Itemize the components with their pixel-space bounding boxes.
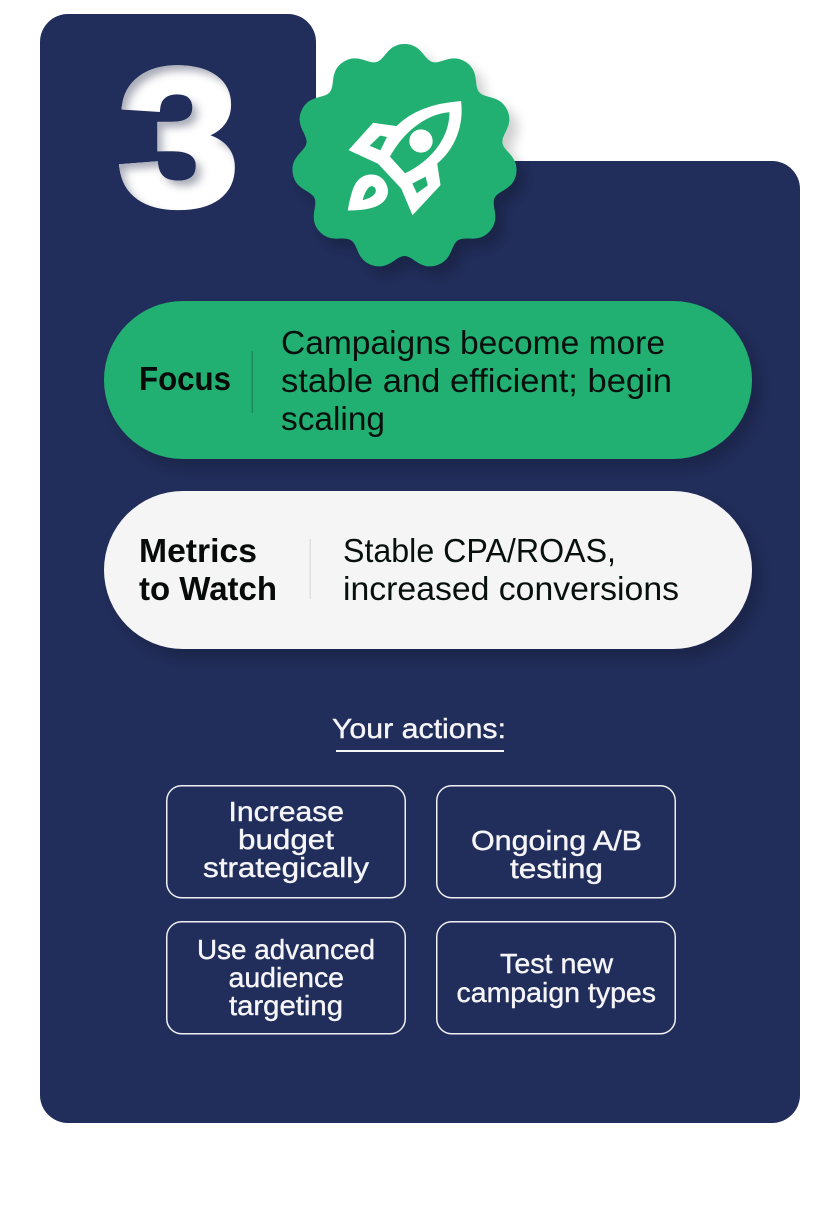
action: test new campaign types xyxy=(437,922,675,1034)
focus description: stable and efficient; begin xyxy=(281,363,672,400)
action: ongoing A/B testing: Ongoing A/B xyxy=(471,825,642,856)
focus description xyxy=(281,325,672,438)
action: use advanced audience targeting: audience xyxy=(228,962,344,993)
panel: metrics pill xyxy=(104,491,752,649)
badge with rocket icon xyxy=(292,44,517,266)
focus description: scaling xyxy=(281,401,385,438)
metrics heading: Metrics xyxy=(139,532,257,569)
metrics description: Stable CPA/ROAS, xyxy=(343,533,616,570)
action: use advanced audience targeting: Use advanced xyxy=(197,934,375,965)
icon: scalloped green badge xyxy=(292,44,517,266)
action: use advanced audience targeting xyxy=(167,922,405,1034)
panel: focus pill xyxy=(104,301,752,459)
metrics pill background xyxy=(104,491,752,649)
action: increase budget strategically: budget xyxy=(238,824,334,855)
icon: rocket xyxy=(348,102,461,214)
action: ongoing A/B testing xyxy=(437,786,675,898)
action: increase budget strategically xyxy=(167,786,405,898)
action: test new campaign types: Test new xyxy=(500,948,613,979)
action: increase budget strategically: Increase xyxy=(228,796,344,827)
metrics heading: to Watch xyxy=(139,570,277,607)
metrics description: increased conversions xyxy=(343,571,679,608)
action: increase budget strategically: strategically xyxy=(203,852,369,883)
metrics description xyxy=(343,533,679,608)
focus description: Campaigns become more xyxy=(281,325,665,362)
focus pill background xyxy=(104,301,752,459)
focus heading: Focus xyxy=(139,360,231,397)
step number 3: 3 xyxy=(119,30,238,246)
action: use advanced audience targeting: targeting xyxy=(229,990,343,1021)
heading: your actions: Your actions: xyxy=(332,713,506,744)
metrics heading xyxy=(139,532,277,607)
action: ongoing A/B testing: testing xyxy=(510,853,603,884)
action: test new campaign types: campaign types xyxy=(456,977,656,1008)
